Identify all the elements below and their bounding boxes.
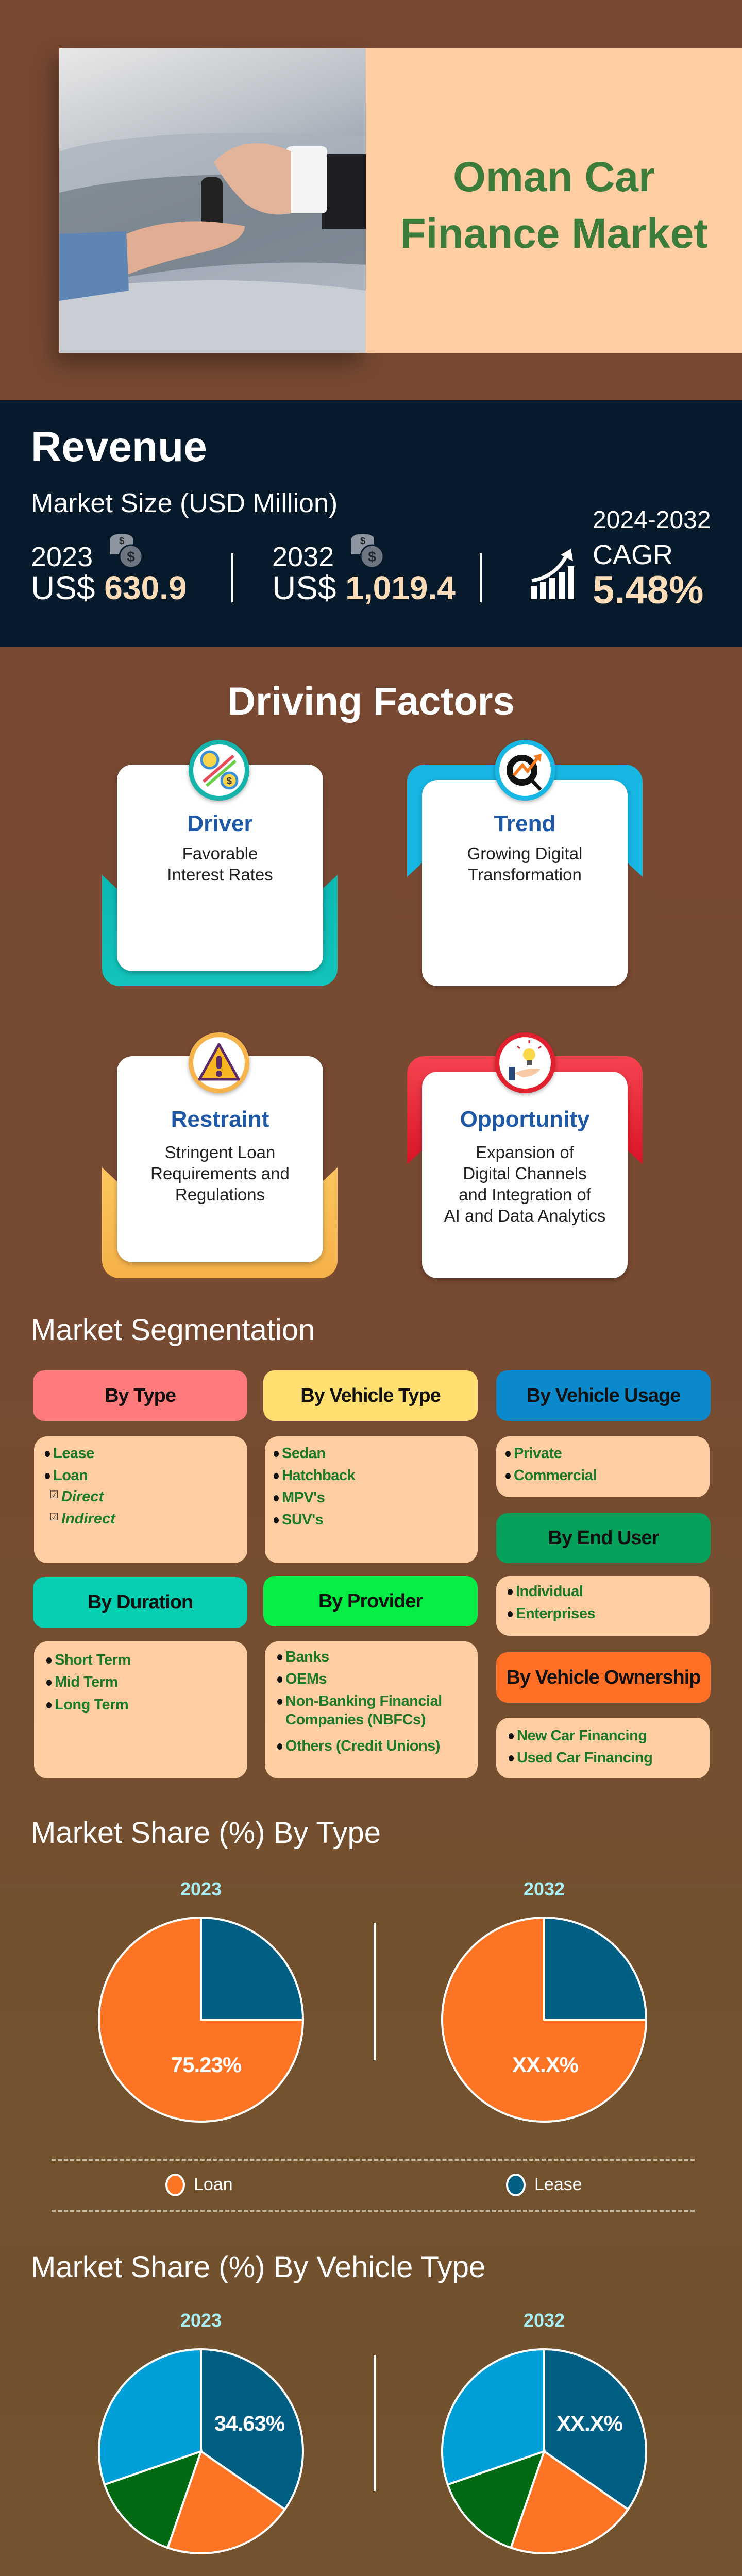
segment: by vehicle type: Hatchback — [282, 1467, 355, 1484]
segment: by vehicle usage: Commercial — [514, 1467, 597, 1484]
panel: driver — [102, 740, 338, 986]
icon: coins: $ — [127, 549, 135, 565]
segment: by provider: OEMs — [285, 1671, 327, 1687]
panel: opportunity: AI and Data Analytics — [444, 1206, 605, 1225]
2023 value — [31, 534, 187, 606]
panel: restraint: Restraint — [171, 1107, 269, 1132]
icon: interest rates: $ — [227, 776, 232, 786]
segment: by provider: Companies (NBFCs) — [285, 1711, 426, 1728]
icon: coins: $ — [119, 536, 124, 546]
hero photo — [59, 48, 366, 353]
segment: by vehicle ownership: By Vehicle Ownership — [506, 1666, 701, 1688]
icon: coins: $ — [360, 536, 365, 546]
chart: pie by vehicle type: XX.X% — [556, 2411, 623, 2435]
segment: by vehicle type: Sedan — [282, 1445, 326, 1462]
revenue band — [0, 400, 742, 647]
segment: by vehicle ownership: New Car Financing — [517, 1727, 647, 1744]
segment: by type: Loan — [53, 1467, 88, 1484]
panel: opportunity: Expansion of — [476, 1143, 574, 1162]
panel: driver: Driver — [187, 811, 253, 836]
panel: restraint — [102, 1032, 338, 1278]
segment: by type: Indirect — [61, 1511, 115, 1527]
icon: growth chart — [531, 549, 574, 599]
panel: driver: Interest Rates — [167, 865, 273, 884]
2023 value: US$ 630.9 — [31, 569, 187, 606]
segment: by provider — [263, 1576, 478, 1778]
panel: restraint: Requirements and — [150, 1164, 290, 1183]
segment: by end user: By End User — [548, 1527, 659, 1549]
revenue heading: Revenue — [31, 423, 207, 470]
CAGR: 5.48% — [593, 568, 704, 612]
CAGR — [593, 506, 711, 612]
chart: pie by vehicle type — [98, 2310, 647, 2554]
segment: by provider: Others (Credit Unions) — [285, 1738, 440, 1754]
market share by type heading: Market Share (%) By Type — [31, 1816, 381, 1850]
chart: pie by vehicle type: 2032 — [524, 2310, 565, 2331]
title panel: Oman Car — [453, 154, 655, 200]
segment: by duration: Mid Term — [55, 1674, 118, 1690]
segment: by end user: Enterprises — [516, 1605, 595, 1622]
panel: trend: Trend — [494, 811, 555, 836]
panel: trend — [407, 740, 643, 990]
2032 value: US$ 1,019.4 — [272, 569, 456, 606]
2032 value: 2032 — [272, 541, 334, 572]
CAGR: CAGR — [593, 539, 673, 570]
icon: interest rates — [189, 740, 249, 801]
chart: pie by type: XX.X% — [512, 2053, 579, 2077]
panel: driver: Favorable — [182, 844, 258, 863]
segment: by type: Direct — [61, 1488, 104, 1505]
panel: opportunity: Digital Channels — [463, 1164, 587, 1183]
segment: by duration — [33, 1577, 247, 1778]
segment: by duration: By Duration — [88, 1591, 193, 1613]
panel: trend: Growing Digital — [467, 844, 582, 863]
divider — [480, 553, 482, 602]
segment: by provider: By Provider — [318, 1590, 423, 1612]
icon: idea hand — [495, 1032, 555, 1093]
icon: coins — [351, 534, 382, 567]
segment: by vehicle usage — [496, 1370, 711, 1497]
icon: coins: $ — [368, 549, 376, 565]
panel: trend: Transformation — [468, 865, 582, 884]
segment: by provider: Non-Banking Financial — [285, 1693, 442, 1709]
segment: by vehicle type: By Vehicle Type — [300, 1385, 441, 1406]
market segmentation heading: Market Segmentation — [31, 1313, 315, 1347]
segment: by type: Lease — [53, 1445, 94, 1462]
segment: by vehicle usage: By Vehicle Usage — [527, 1385, 680, 1406]
icon: coins — [110, 534, 141, 567]
panel: opportunity: Opportunity — [460, 1107, 589, 1132]
2023 value: 2023 — [31, 541, 93, 572]
icon: digital trend — [495, 740, 555, 801]
segment: by type: ☑ — [49, 1489, 59, 1501]
segment: by vehicle ownership: Used Car Financing — [517, 1750, 652, 1766]
driving factors heading: Driving Factors — [227, 680, 515, 723]
chart: pie by type: 2032 — [524, 1878, 565, 1900]
chart: pie by type: 75.23% — [171, 2053, 242, 2077]
segment: by vehicle type: SUV's — [282, 1512, 323, 1528]
segment: by end user: Individual — [516, 1583, 583, 1600]
segment: by duration: Long Term — [55, 1697, 128, 1713]
panel: restraint: Regulations — [175, 1185, 265, 1204]
divider — [231, 553, 233, 602]
segment: by vehicle type — [263, 1370, 478, 1563]
segment: by type — [33, 1370, 247, 1563]
segment: by vehicle ownership — [496, 1652, 711, 1778]
segment: by vehicle type: MPV's — [282, 1489, 325, 1506]
panel: restraint: Stringent Loan — [165, 1143, 275, 1162]
market share by vehicle type heading: Market Share (%) By Vehicle Type — [31, 2250, 485, 2284]
segment: by type: By Type — [105, 1385, 176, 1406]
segment: by end user — [496, 1513, 711, 1636]
2032 value — [272, 534, 456, 606]
market size label: Market Size (USD Million) — [31, 488, 338, 518]
legend: type: Loan — [194, 2175, 233, 2194]
panel: opportunity — [407, 1032, 643, 1282]
legend: type — [165, 2174, 582, 2196]
segment: by provider: Banks — [285, 1649, 329, 1665]
title panel: Finance Market — [400, 210, 707, 257]
chart: pie by vehicle type: 34.63% — [214, 2411, 285, 2435]
icon: warning — [189, 1032, 249, 1093]
legend: type: Lease — [534, 2175, 582, 2194]
chart: pie by type: 2023 — [180, 1878, 222, 1900]
segment: by duration: Short Term — [55, 1652, 131, 1668]
chart: pie by type — [98, 1878, 647, 2123]
segment: by vehicle usage: Private — [514, 1445, 562, 1462]
chart: pie by vehicle type: 2023 — [180, 2310, 222, 2331]
panel: opportunity: and Integration of — [459, 1185, 591, 1204]
segment: by type: ☑ — [49, 1512, 59, 1523]
title panel — [366, 48, 742, 353]
CAGR: 2024-2032 — [593, 506, 711, 534]
